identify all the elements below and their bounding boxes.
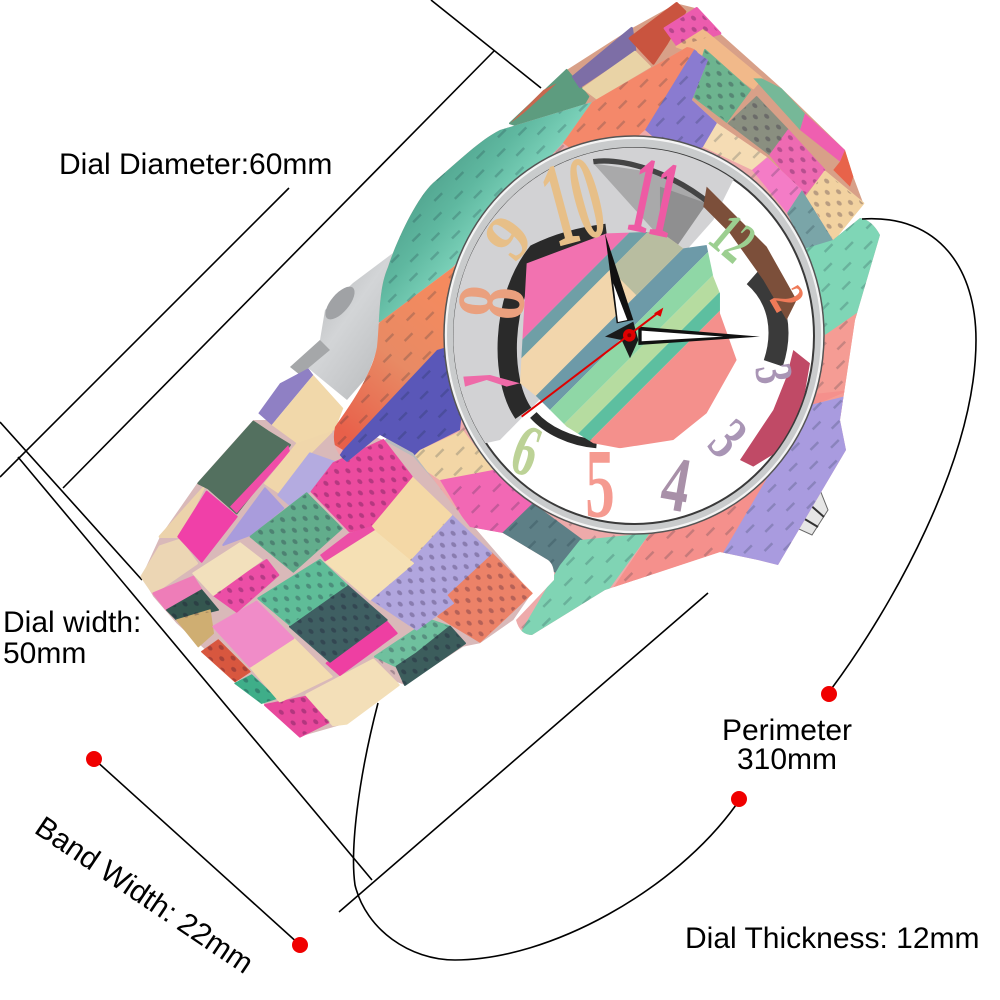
case bbox=[334, 47, 880, 635]
label: perimeter: Perimeter bbox=[722, 714, 852, 747]
red dot: perimeter bbox=[821, 686, 837, 702]
label: dial width: 50mm bbox=[3, 637, 86, 670]
numerals bbox=[436, 130, 815, 538]
dimension line: top right edge bbox=[431, 0, 541, 88]
upper band links bbox=[510, 3, 863, 240]
band links near clasp bbox=[258, 368, 343, 443]
bezel bbox=[444, 136, 824, 534]
numerals: 3 bbox=[696, 405, 761, 471]
curve: dial thickness bbox=[354, 703, 736, 960]
dimension lines: dial diameter bbox=[0, 51, 494, 488]
numerals: 11 bbox=[619, 134, 690, 262]
hands bbox=[522, 233, 760, 417]
dimension line: lower diagonal bbox=[339, 593, 708, 912]
red dot: band width start bbox=[86, 751, 102, 767]
red dot: band width end bbox=[292, 937, 308, 953]
dimension lines: dial width and band width bbox=[0, 422, 372, 880]
icon: crown bbox=[790, 490, 828, 535]
numerals: 2 bbox=[759, 278, 815, 320]
numerals: 5 bbox=[585, 429, 615, 538]
lower band texture bbox=[167, 440, 532, 737]
dial face bbox=[346, 52, 922, 628]
label: band width: Band Width: 22mm bbox=[29, 810, 259, 980]
numerals: 3 bbox=[744, 359, 805, 388]
stripes bbox=[520, 232, 736, 448]
curve: perimeter bbox=[832, 219, 976, 688]
numerals: 8 bbox=[436, 281, 546, 323]
line: band width bbox=[94, 759, 300, 945]
dial bbox=[443, 135, 825, 535]
upper band texture bbox=[665, 8, 863, 240]
lower band links bbox=[142, 420, 532, 737]
label: dial thickness: Dial Thickness: 12mm bbox=[685, 922, 980, 955]
label: perimeter: 310mm bbox=[737, 743, 837, 776]
red dot: dial thickness bbox=[731, 791, 747, 807]
label: dial diameter: Dial Diameter:60mm bbox=[59, 148, 332, 181]
numerals: 4 bbox=[655, 439, 697, 529]
numerals: 9 bbox=[470, 202, 547, 274]
clasp bbox=[290, 253, 440, 505]
watch bbox=[142, 3, 922, 737]
numerals: 10 bbox=[529, 130, 618, 273]
label: dial width: Dial width: bbox=[3, 606, 141, 639]
numerals: 6 bbox=[501, 409, 551, 493]
numeral remnant: 7 bbox=[463, 375, 520, 387]
numerals: 12 bbox=[698, 201, 768, 275]
